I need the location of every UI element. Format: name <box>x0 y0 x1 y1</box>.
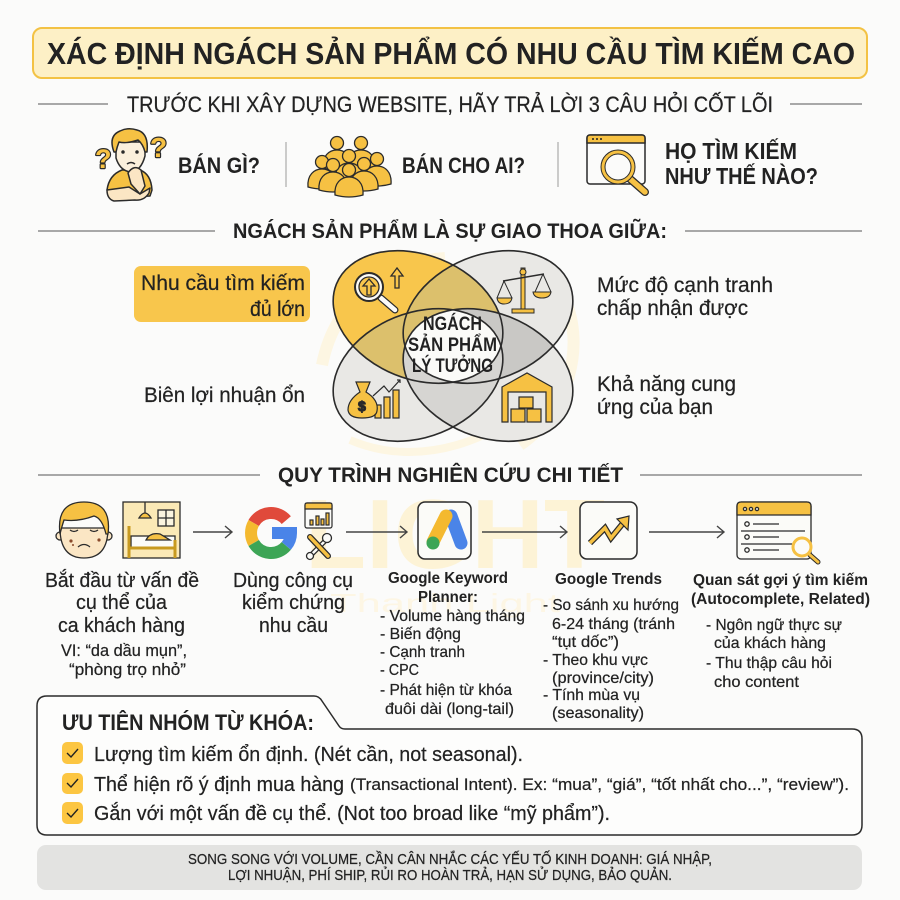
step 3: Google Keyword Planner <box>380 502 525 718</box>
step 4 list: (seasonality) <box>552 705 644 722</box>
step 4 heading: Google Trends <box>555 571 662 588</box>
question row <box>95 129 818 201</box>
label: competition: Mức độ cạnh tranh <box>597 274 773 297</box>
step 4 list: - Tính mùa vụ <box>543 687 640 704</box>
step 4 list: (province/city) <box>552 670 654 687</box>
icon: face with acne <box>56 502 112 558</box>
step 3 heading <box>388 570 508 606</box>
panel: keyword priorities <box>37 696 862 835</box>
label: profit margin: Biên lợi nhuận ổn <box>144 384 305 407</box>
footer note: SONG SONG VỚI VOLUME, CẦN CÂN NHẮC CÁC YẾU TỐ KINH DOANH: GIÁ NHẬP, <box>188 850 712 868</box>
step 1 heading: Bắt đầu từ vấn đề <box>45 569 199 592</box>
step 5 list: cho content <box>714 674 800 691</box>
question: who to sell to: BÁN CHO AI? <box>402 153 525 178</box>
watermark logo <box>305 258 605 618</box>
watermark logo: LIGHT <box>305 479 605 589</box>
icon: question marks: ? <box>95 144 112 174</box>
icon: group of people <box>308 136 391 197</box>
step 5 heading: (Autocomplete, Related) <box>691 591 870 608</box>
step 3 list: - Volume hàng tháng <box>380 608 525 625</box>
question: what to sell: BÁN GÌ? <box>178 153 260 178</box>
footer note: LỢI NHUẬN, PHÍ SHIP, RỦI RO HOÀN TRẢ, HẠN SỬ DỤNG, BẢO QUẢN. <box>228 866 672 884</box>
label: supply ability: ứng của bạn <box>597 396 713 419</box>
icon: question marks <box>95 132 167 174</box>
step 1 example: VI: “da dầu mụn”, <box>61 641 187 660</box>
question: how they search <box>665 137 818 189</box>
section heading: research process: QUY TRÌNH NGHIÊN CỨU CHI TIẾT <box>278 463 623 487</box>
step 5 list: - Thu thập câu hỏi <box>706 655 832 672</box>
venn centre label: LÝ TƯỞNG <box>412 355 493 377</box>
step 3 list <box>380 608 525 718</box>
icon: magnifier with growth arrows <box>355 268 403 310</box>
icon: trend arrow <box>580 502 637 559</box>
step 3 list: - Cạnh tranh <box>380 644 465 661</box>
icon: money bag and bars <box>348 380 400 418</box>
icon: chart window <box>305 503 332 528</box>
step 1 example <box>61 641 187 679</box>
check item 2: Thể hiện rõ ý định mua hàng <box>94 774 344 796</box>
step 2: validate with tools <box>233 503 353 637</box>
step 1 heading: cụ thể của <box>76 592 168 614</box>
step 1 heading: ca khách hàng <box>58 615 185 637</box>
icon: search window <box>587 135 645 192</box>
arrow <box>649 526 724 538</box>
label: competition: chấp nhận được <box>597 297 748 320</box>
title banner: XÁC ĐỊNH NGÁCH SẢN PHẨM CÓ NHU CẦU TÌM KIẾM CAO <box>47 35 855 71</box>
icon: thinking person <box>95 129 167 201</box>
step 5 list: - Ngôn ngữ thực sự <box>706 617 842 634</box>
step 4: Google Trends <box>543 502 679 722</box>
step 2 text: kiểm chứng <box>242 592 345 614</box>
icon: Google G <box>251 513 291 553</box>
label: search demand: Nhu cầu tìm kiếm <box>141 272 305 295</box>
step 3 list: - CPC <box>380 662 419 679</box>
question: how they search: NHƯ THẾ NÀO? <box>665 162 818 189</box>
icon: tools <box>306 534 332 560</box>
step 3 list: đuôi dài (long-tail) <box>385 701 514 718</box>
subtitle: TRƯỚC KHI XÂY DỰNG WEBSITE, HÃY TRẢ LỜI 3 CÂU HỎI CỐT LÕI <box>127 91 773 117</box>
step 2 text <box>233 570 353 637</box>
step 4 list: “tụt dốc”) <box>552 634 619 651</box>
step 5 heading <box>691 572 870 608</box>
panel heading: ƯU TIÊN NHÓM TỪ KHÓA: <box>62 710 314 735</box>
label: competition <box>597 274 773 320</box>
step 4 list: - So sánh xu hướng <box>543 597 679 614</box>
step 3 heading: Google Keyword <box>388 570 508 587</box>
section heading: intersection: NGÁCH SẢN PHẨM LÀ SỰ GIAO THOA GIỮA: <box>233 219 667 243</box>
step 3 list: - Phát hiện từ khóa <box>380 682 512 699</box>
icon: money bag and bars: $ <box>358 398 366 414</box>
icon: warehouse <box>502 373 552 422</box>
step 3 heading: Planner: <box>418 589 478 606</box>
step 1 example: “phòng trọ nhỏ” <box>69 660 186 679</box>
venn centre label <box>408 313 497 377</box>
step 2 text: Dùng công cụ <box>233 570 353 592</box>
step 5 list: của khách hàng <box>714 635 826 652</box>
step 4 list: 6-24 tháng (tránh <box>552 616 675 633</box>
icon: small room with bed <box>123 502 180 558</box>
label: supply ability: Khả năng cung <box>597 373 736 396</box>
arrow <box>193 526 232 538</box>
check item 1: Lượng tìm kiếm ổn định. (Nét cần, not seasonal). <box>94 744 523 766</box>
check item 2 <box>62 773 849 796</box>
icon: question marks: ? <box>150 132 167 163</box>
icon: autocomplete window <box>737 502 818 562</box>
check item 3: Gắn với một vấn đề cụ thể. (Not too broad like “mỹ phẩm”). <box>94 802 610 825</box>
step 5 heading: Quan sát gợi ý tìm kiếm <box>693 572 868 589</box>
step 4 list: - Theo khu vực <box>543 652 648 669</box>
step 5 list <box>706 617 842 691</box>
venn diagram <box>332 250 574 442</box>
label: search demand <box>134 266 310 322</box>
step 3 list: - Biến động <box>380 626 461 643</box>
step 2 text: nhu cầu <box>259 615 328 637</box>
check item 2: (Transactional Intent). Ex: “mua”, “giá”, “tốt nhất cho...”, “review”). <box>350 775 849 794</box>
icon: balance scale <box>497 268 551 313</box>
footer note <box>37 845 862 890</box>
step 1 heading <box>45 569 199 637</box>
step 5: search suggestions <box>691 502 870 691</box>
arrow <box>482 526 567 538</box>
question: how they search: HỌ TÌM KIẾM <box>665 137 797 164</box>
label: supply ability <box>597 373 736 419</box>
step 1: customer problem <box>45 502 199 679</box>
arrow <box>346 526 407 538</box>
watermark logo: Thanh Light <box>330 588 561 618</box>
label: search demand: đủ lớn <box>250 298 305 321</box>
icon: Google Ads <box>418 502 471 559</box>
venn centre label: NGÁCH <box>423 313 482 335</box>
title banner <box>33 28 867 78</box>
venn centre label: SẢN PHẨM <box>408 334 497 356</box>
step 4 list <box>543 597 679 722</box>
